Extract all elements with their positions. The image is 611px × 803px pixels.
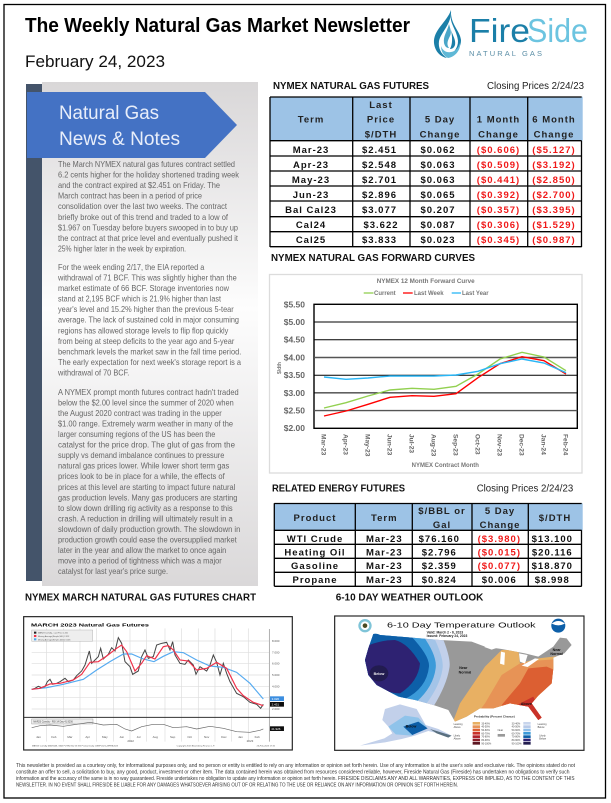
icon: agency seal bbox=[358, 619, 372, 632]
time axis: MAR23 Comdty (NATGAS, GAS FUTR) Mar'23 NG Prompt Daily 11SEP2021-28FEB2023 bbox=[32, 744, 119, 747]
price axis labels: 6.000 bbox=[272, 662, 280, 666]
row: Heating Oil: $2.796 bbox=[422, 548, 457, 558]
time axis: Jul bbox=[137, 735, 141, 739]
text block: paragraph 3: slowdown of daily production growth. The slowdown in bbox=[58, 524, 240, 534]
time axis: Jan bbox=[238, 735, 243, 739]
heading: NYMEX natural gas futures: NYMEX NATURAL GAS FUTURES bbox=[273, 80, 429, 92]
text block: paragraph 3: to slow down drilling rig activity as a response to this bbox=[58, 503, 233, 513]
row: Cal25: Cal25 bbox=[296, 235, 326, 246]
row: Bal Cal23: Bal Cal23 bbox=[285, 205, 337, 216]
row: WTI Crude: WTI Crude bbox=[287, 534, 343, 545]
row: Bal Cal23 bbox=[285, 205, 576, 216]
row: Cal25: ($0.345) bbox=[477, 235, 520, 246]
text block: paragraph 3: the August 2020 contract was trading in the upper bbox=[58, 408, 222, 418]
x axis labels: May-23 bbox=[364, 434, 371, 457]
time axis: Feb bbox=[255, 735, 260, 739]
row: Cal24: $0.087 bbox=[420, 220, 456, 231]
legend: Current bbox=[374, 291, 396, 297]
table header: 5 Day bbox=[425, 115, 455, 126]
row: WTI Crude: Mar-23 bbox=[366, 534, 403, 545]
row: Heating Oil: Mar-23 bbox=[366, 548, 403, 558]
row: Propane: Mar-23 bbox=[366, 575, 403, 586]
x axis labels: Jan-24 bbox=[540, 434, 547, 455]
y axis labels: $3.00 bbox=[284, 388, 305, 398]
row: Cal24: ($0.306) bbox=[477, 220, 520, 231]
icon: flame bbox=[434, 10, 461, 58]
row: Gasoline: $18.870 bbox=[532, 561, 573, 572]
text block: paragraph 3: supply vs demand imbalance continues to pressure bbox=[58, 450, 224, 460]
lower momentum panel: MAR23 Comdty - RSI 14 Day 41.9256 bbox=[33, 721, 74, 724]
text block: paragraph 3: below the $2.00 level since the summer of 2020 when bbox=[58, 398, 234, 408]
text block: paragraph 1: and the contract expired at $2.451 on Friday. The bbox=[58, 180, 220, 190]
row: Propane bbox=[292, 575, 570, 586]
map legend: Above bbox=[454, 737, 461, 740]
row: May-23: ($0.441) bbox=[477, 175, 520, 186]
logo wordmark: Fire bbox=[469, 12, 530, 49]
map legend: 60-70% bbox=[512, 732, 521, 735]
banner heading: Natural Gas bbox=[59, 103, 159, 124]
map legend: 90-100% bbox=[512, 742, 522, 745]
price axis labels: 7.000 bbox=[272, 650, 280, 654]
table header: $/BBL or bbox=[418, 506, 466, 517]
line: price bbox=[32, 638, 263, 708]
map legend: Near bbox=[498, 729, 503, 732]
text block: paragraph 2: stand at 2,195 BCF which is 21.9% higher than last bbox=[58, 294, 222, 304]
row: WTI Crude bbox=[287, 534, 573, 545]
time axis: 2023 bbox=[247, 739, 254, 743]
text block: paragraph 3: later in the year and allow the market to once again bbox=[58, 545, 226, 555]
closing prices note: Closing Prices 2/24/23 bbox=[477, 484, 574, 495]
table header: 1 Month bbox=[477, 115, 520, 126]
map: 6-10 day temperature outlook bbox=[335, 616, 584, 750]
Great Lakes bbox=[484, 643, 539, 667]
text block: paragraph 3: A NYMEX prompt month futures contract hadn't traded bbox=[58, 387, 239, 397]
y axis title: $/dth bbox=[277, 362, 283, 374]
row: Bal Cal23: ($0.357) bbox=[477, 205, 520, 216]
line: current bbox=[324, 352, 566, 408]
row: Jun-23: $0.065 bbox=[420, 190, 456, 201]
row: Mar-23: ($0.606) bbox=[477, 145, 520, 156]
time axis: Aug bbox=[153, 735, 158, 739]
x axis labels: Apr-23 bbox=[342, 434, 349, 455]
row: Heating Oil bbox=[284, 548, 573, 558]
row: Propane: $0.006 bbox=[482, 575, 517, 586]
below normal regions bbox=[362, 632, 450, 707]
map labels: Near bbox=[553, 648, 561, 652]
map title: 6-10 Day Temperature Outlook bbox=[387, 621, 536, 630]
text block: paragraph 3: gas production levels. Many gas producers are starting bbox=[58, 492, 237, 502]
table header: Change bbox=[534, 130, 574, 141]
table header: $/DTH bbox=[365, 130, 397, 141]
text block: paragraph 2: For the week ending 2/17, the EIA reported a bbox=[58, 262, 204, 272]
price axis labels: 8.000 bbox=[272, 639, 280, 643]
row: Mar-23: $0.062 bbox=[420, 145, 456, 156]
y axis labels bbox=[284, 299, 305, 433]
map dates bbox=[427, 631, 468, 638]
price axis labels bbox=[269, 629, 284, 742]
date: February 24, 2023 bbox=[25, 52, 165, 71]
text block: paragraph 3: catalyst for last year's price surge. bbox=[58, 566, 168, 576]
row: Bal Cal23: $3.077 bbox=[362, 205, 397, 216]
row: Jun-23: Jun-23 bbox=[293, 190, 329, 201]
time axis: Mar bbox=[67, 735, 72, 739]
map labels: Normal bbox=[550, 652, 563, 656]
map legend: 50-60% bbox=[512, 729, 521, 732]
closing prices note: Closing Prices 2/24/23 bbox=[487, 81, 584, 92]
x axis labels bbox=[320, 434, 569, 457]
map legend: Probability (Percent Chance) bbox=[474, 715, 515, 719]
text block: paragraph 3 bbox=[58, 387, 240, 576]
heading: NYMEX March chart: NYMEX MARCH NATURAL GAS FUTURES CHART bbox=[25, 592, 257, 604]
map legend: 60-70% bbox=[481, 732, 491, 735]
row: May-23: $2.701 bbox=[362, 175, 397, 186]
text block: paragraph 1: March contract has been in a period of price bbox=[58, 191, 202, 201]
row: Propane: $0.824 bbox=[422, 575, 457, 586]
row: Cal24: $3.622 bbox=[363, 220, 399, 231]
text block: paragraph 2: benchmark levels the market saw in the fall time period. bbox=[58, 346, 241, 356]
legend: Moving Average(Simple,100D) 3.026 bbox=[38, 638, 71, 641]
row: Bal Cal23: ($3.395) bbox=[532, 205, 576, 216]
map legend bbox=[454, 715, 547, 745]
disclaimer footer bbox=[16, 763, 575, 788]
text block: paragraph 2: from being at steep deficits to the year ago and 5-year bbox=[58, 336, 234, 346]
text block: paragraph 2 bbox=[57, 262, 241, 378]
table header: Gal bbox=[433, 520, 451, 531]
row: Bal Cal23: $0.207 bbox=[420, 205, 456, 216]
x axis labels: Sep-23 bbox=[452, 434, 459, 456]
row: Jun-23: ($2.700) bbox=[532, 190, 576, 201]
map legend: Below bbox=[538, 726, 545, 729]
legend bbox=[364, 291, 489, 297]
row: Apr-23: ($0.509) bbox=[477, 160, 520, 171]
row: May-23 bbox=[292, 175, 576, 186]
time axis: Nov bbox=[204, 735, 210, 739]
time axis: Jan bbox=[36, 735, 41, 739]
map legend: 70-80% bbox=[512, 736, 521, 739]
text block: paragraph 1: $1.967 on Tuesday before buyers swooped in to buy up bbox=[58, 222, 238, 232]
row: May-23: May-23 bbox=[292, 175, 330, 186]
above normal regions bbox=[454, 650, 558, 722]
logo: FireSide Natural Gas bbox=[434, 10, 588, 58]
legend: MAR23 Comdty - Last Price 2.451 bbox=[38, 632, 68, 635]
time axis: May bbox=[102, 735, 108, 739]
heading: related energy futures: RELATED ENERGY FUTURES bbox=[272, 483, 405, 495]
map legend: 33-40% bbox=[481, 722, 491, 725]
table header: Change bbox=[420, 130, 460, 141]
time axis bbox=[32, 735, 276, 747]
banner arrow: News & Notes bbox=[59, 129, 180, 150]
table header: Price bbox=[367, 115, 395, 126]
y axis labels: $2.00 bbox=[284, 423, 305, 433]
y axis labels: $5.00 bbox=[284, 317, 305, 327]
x axis labels: Dec-23 bbox=[518, 434, 525, 456]
row: May-23: ($2.850) bbox=[532, 175, 576, 186]
legend: Moving Average(Simple,50D) 2.952 bbox=[38, 635, 69, 638]
table header: Change bbox=[478, 130, 519, 141]
row: Heating Oil: Heating Oil bbox=[284, 548, 346, 558]
map labels bbox=[374, 648, 563, 706]
disclaimer footer: NEWSLETTER. IN NO EVENT SHALL FIRESIDE BE LIABLE FOR ANY DAMAGES WHATSOEVER ARISING OUT OF OR RELATING TO THE USE OR RELIANCE ON ANY INFORMATION OR OPINION SET FORTH HEREIN. bbox=[16, 782, 458, 788]
text block: paragraph 3: $1.00 range. Extremely warm weather in many of the bbox=[58, 419, 233, 429]
legend bbox=[32, 630, 93, 641]
logo: FireSide Natural Gas: Side bbox=[527, 12, 588, 49]
table header: 6 Month bbox=[532, 115, 576, 126]
row: Jun-23 bbox=[293, 190, 576, 201]
text block: paragraph 1: 6.2 cents higher for the holiday shortened trading week bbox=[58, 170, 240, 180]
table header: Term bbox=[298, 115, 324, 126]
row: Mar-23: ($5.127) bbox=[532, 145, 576, 156]
disclaimer footer: constitute an offer to sell, a solicitation to buy, any good, product, investment or other item. The data contained herein was obtained from resources considered reliable, however, Fireside Natural Gas (Fireside) has undertaken no obligations to verify such bbox=[16, 770, 570, 776]
map labels: Below bbox=[374, 672, 385, 676]
row: Apr-23: $0.063 bbox=[420, 160, 456, 171]
row: Jun-23: $2.896 bbox=[362, 190, 397, 201]
y axis labels: $2.50 bbox=[284, 406, 305, 416]
row: WTI Crude: ($3.980) bbox=[478, 534, 521, 545]
disclaimer footer: This newsletter is provided as a courtesy only, for informational purposes only, and no person or entity is entitled to rely on any information or opinion set forth herein. Use of any information is at the user's sole and exclusive risk. The opinions stated do not bbox=[16, 763, 575, 769]
row: Cal25: $3.833 bbox=[362, 235, 397, 246]
text block: paragraph 3: natural gas prices lower. While lower short term gas bbox=[58, 461, 229, 471]
map dates: Valid: March 2 - 6, 2023 bbox=[427, 631, 463, 635]
row: Apr-23: ($3.192) bbox=[532, 160, 576, 171]
time axis: Apr bbox=[85, 735, 90, 739]
time axis: 2022 bbox=[127, 739, 134, 743]
x axis labels: Feb-24 bbox=[562, 434, 569, 456]
Alaska bbox=[360, 704, 452, 746]
title: The Weekly Natural Gas Market Newsletter bbox=[25, 15, 410, 37]
table header bbox=[294, 506, 571, 531]
text block: paragraph 2: withdrawal of 70 BCF. bbox=[57, 368, 129, 378]
row: Mar-23: Mar-23 bbox=[293, 145, 329, 156]
heading: forward curves: NYMEX NATURAL GAS FORWARD CURVES bbox=[271, 252, 475, 264]
map legend: 40-50% bbox=[512, 726, 521, 729]
map labels: Above bbox=[521, 702, 532, 706]
map labels: Near bbox=[459, 666, 468, 670]
x axis labels: Oct-23 bbox=[474, 434, 481, 455]
map legend: 33-40% bbox=[512, 722, 521, 725]
price axis labels: 2.000 bbox=[272, 707, 280, 711]
plot grid bbox=[314, 304, 577, 428]
table header: Term bbox=[371, 513, 398, 524]
table header: Product bbox=[294, 513, 336, 524]
chart title: MARCH 2023 Natural Gas Futures bbox=[31, 623, 149, 629]
price axis labels: 5.000 bbox=[272, 673, 280, 677]
time axis: Jun bbox=[119, 735, 124, 739]
row: WTI Crude: $13.100 bbox=[532, 534, 573, 545]
table header: Change bbox=[480, 520, 520, 531]
row: Mar-23 bbox=[293, 145, 576, 156]
row: Gasoline: ($0.077) bbox=[478, 561, 521, 572]
text block: paragraph 1: consolidation over the last two weeks. The contract bbox=[58, 201, 228, 211]
x axis labels: Jun-23 bbox=[386, 434, 393, 456]
map legend: 80-90% bbox=[481, 739, 491, 742]
row: Gasoline: $2.359 bbox=[422, 561, 457, 572]
chart: 12 month forward curve bbox=[270, 274, 582, 473]
time axis: 23-Feb-2023 17:32 bbox=[257, 745, 276, 747]
chart title: NYMEX 12 Month Forward Curve bbox=[377, 278, 475, 285]
row: Propane: $8.998 bbox=[535, 575, 570, 586]
y axis labels: $3.50 bbox=[284, 370, 305, 380]
map legend: Leaning bbox=[538, 723, 547, 726]
x axis labels: Nov-23 bbox=[496, 434, 503, 456]
map legend: 80-90% bbox=[512, 739, 521, 742]
time axis: Oct bbox=[187, 735, 192, 739]
logo tagline: NATURAL GAS bbox=[469, 49, 542, 58]
row: WTI Crude: $76.160 bbox=[419, 534, 460, 545]
map legend: 40-50% bbox=[481, 726, 491, 729]
text block: paragraph 3: production growth could ease the oversupplied market bbox=[58, 534, 237, 544]
row: Jun-23: ($0.392) bbox=[477, 190, 520, 201]
row: Cal25: $0.023 bbox=[420, 235, 456, 246]
table header bbox=[298, 100, 576, 141]
row: Gasoline bbox=[291, 561, 573, 572]
lower momentum panel bbox=[24, 717, 292, 732]
line: 100 day average bbox=[32, 652, 263, 699]
text block: paragraph 2: regions has allowed storage levels to flip flop quickly bbox=[58, 325, 229, 335]
x axis labels: Aug-23 bbox=[430, 434, 437, 457]
icon: NOAA seal bbox=[551, 619, 565, 633]
contiguous US temperature map bbox=[362, 632, 575, 725]
y axis labels: $4.00 bbox=[284, 352, 305, 362]
lower momentum panel: 41.926 bbox=[271, 727, 281, 731]
Alaska: Below bbox=[406, 725, 417, 729]
line: last week bbox=[324, 357, 566, 416]
row: Apr-23: $2.548 bbox=[362, 160, 397, 171]
row: Cal24: ($1.529) bbox=[532, 220, 576, 231]
text block: paragraph 1: The March NYMEX natural gas futures contract settled bbox=[58, 159, 235, 169]
row: Cal25 bbox=[296, 235, 576, 246]
text block: paragraph 3: prices at this level are starting to impact future natural bbox=[58, 482, 235, 492]
map labels: Normal bbox=[459, 671, 471, 675]
row: Gasoline: Gasoline bbox=[291, 561, 339, 572]
x axis labels: Mar-23 bbox=[320, 434, 327, 456]
price axis labels: 3.026 bbox=[272, 697, 279, 701]
row: Heating Oil: ($0.015) bbox=[478, 548, 521, 558]
row: Propane: Propane bbox=[292, 575, 338, 586]
table header: Last bbox=[369, 100, 393, 111]
map legend: Leaning bbox=[454, 723, 463, 726]
map legend: Likely bbox=[454, 734, 461, 737]
row: May-23: $0.063 bbox=[420, 175, 456, 186]
time axis: Copyright 2023 Bloomberg Finance L.P. bbox=[177, 744, 215, 747]
text block: paragraph 3: move into a period of tightness which was a major bbox=[58, 556, 222, 566]
x axis labels: Jul-23 bbox=[408, 434, 415, 453]
panel: news and notes sidebar bbox=[26, 82, 258, 586]
time axis: Feb bbox=[51, 735, 57, 739]
row: Cal24: Cal24 bbox=[296, 220, 326, 231]
map legend: Likely bbox=[539, 734, 546, 737]
row: Apr-23 bbox=[293, 160, 576, 171]
map legend: 50-60% bbox=[481, 729, 491, 732]
text block: paragraph 3: crash. A reduction in drilling will ultimately result in a bbox=[58, 513, 233, 523]
legend: Last Week bbox=[414, 291, 444, 297]
table header: $/DTH bbox=[539, 513, 571, 524]
row: Mar-23: $2.451 bbox=[362, 145, 397, 156]
time axis: Dec bbox=[221, 735, 227, 739]
text block: paragraph 1: briefly broke out of this trend and traded to a low of bbox=[58, 212, 229, 222]
row: Apr-23: Apr-23 bbox=[293, 160, 329, 171]
line: last year bbox=[324, 359, 566, 379]
table header: 5 Day bbox=[485, 506, 515, 517]
x axis title: NYMEX Contract Month bbox=[412, 463, 479, 469]
price axis labels: 4.000 bbox=[272, 684, 280, 688]
map legend: Above bbox=[454, 726, 461, 729]
text block: paragraph 2: average. The lack of sustained cold in major consuming bbox=[58, 315, 239, 325]
map legend: 90-100% bbox=[481, 742, 492, 745]
text block: paragraph 2: The early expectation for next week's storage report is a bbox=[58, 357, 241, 367]
chart: March 2023 futures bbox=[24, 617, 292, 750]
text block: paragraph 1: 25% higher later in the week by expiration. bbox=[58, 243, 186, 253]
row: Heating Oil: $20.116 bbox=[532, 548, 573, 558]
legend: Last Year bbox=[462, 291, 489, 297]
table: natural gas futures bbox=[270, 97, 583, 247]
price axis labels: 2.451 bbox=[272, 703, 279, 707]
row: Cal25: ($0.987) bbox=[532, 235, 576, 246]
line: 50 day average bbox=[32, 645, 263, 706]
time axis: Sep bbox=[170, 735, 176, 739]
text block: paragraph 3: larger consuming regions of the US has been the bbox=[58, 429, 215, 439]
row: Gasoline: Mar-23 bbox=[366, 561, 403, 572]
text block: paragraph 2: market estimate of 66 BCF. Storage inventories now bbox=[58, 283, 230, 293]
text block: paragraph 1 bbox=[58, 159, 240, 253]
table: related energy futures bbox=[274, 503, 583, 586]
y axis labels: $4.50 bbox=[284, 335, 305, 345]
text block: paragraph 2: year's level and 15.2% higher than the previous 5-tear bbox=[58, 304, 234, 314]
banner arrow bbox=[27, 92, 237, 158]
text block: paragraph 3: catalyst for the price drop. The glut of gas from the bbox=[58, 440, 235, 450]
row: Cal24 bbox=[296, 220, 576, 231]
text block: paragraph 3: prices look to be in place for a while, the effects of bbox=[58, 471, 225, 481]
map legend: 70-80% bbox=[481, 736, 491, 739]
text block: paragraph 2: withdrawal of 71 BCF. This was slightly higher than the bbox=[57, 272, 237, 282]
heading: weather outlook: 6-10 DAY WEATHER OUTLOOK bbox=[336, 592, 484, 604]
y axis labels: $5.50 bbox=[284, 299, 305, 309]
map dates: Issued: February 24, 2023 bbox=[427, 634, 468, 638]
map legend: Below bbox=[539, 737, 546, 740]
text block: paragraph 1: the contract at that price level and eventually pushed it bbox=[58, 233, 239, 243]
